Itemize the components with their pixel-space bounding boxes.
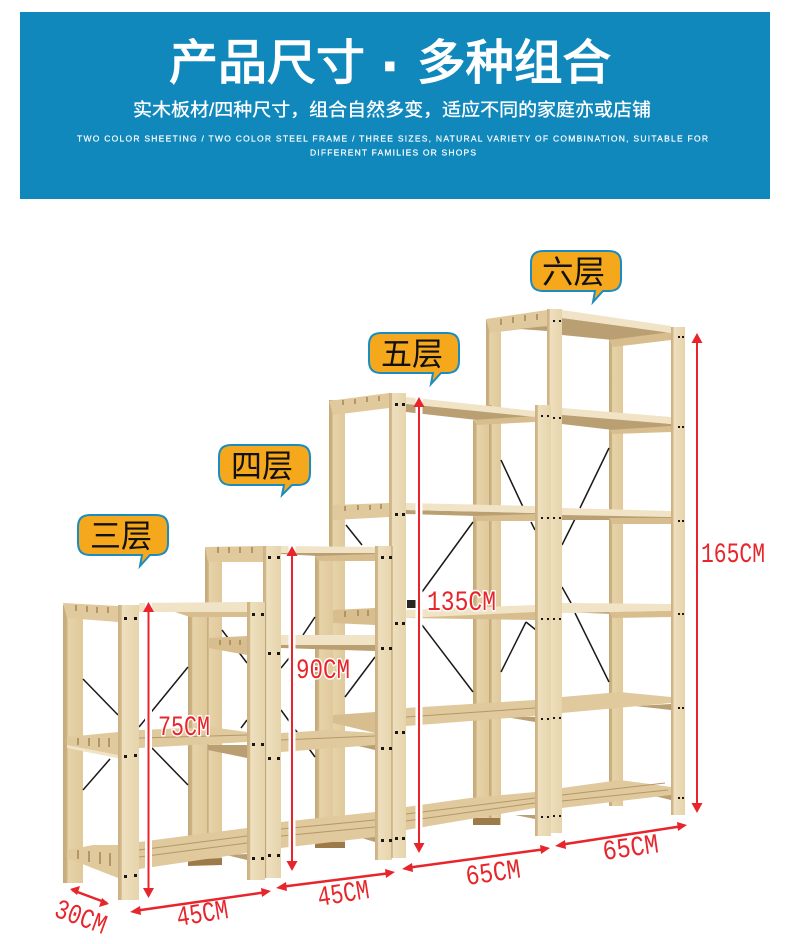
subtitle: 实木板材/四种尺寸，组合自然多变，适应不同的家庭亦或店铺 bbox=[133, 100, 651, 120]
callout: 五层 bbox=[369, 333, 459, 384]
callout: 六层: 六层 bbox=[542, 254, 605, 290]
title: 多种组合 bbox=[417, 37, 611, 90]
small black fitting bbox=[407, 600, 417, 608]
header banner bbox=[20, 12, 770, 199]
arrow: 90CM height bbox=[286, 544, 298, 871]
english description: TWO COLOR SHEETING / TWO COLOR STEEL FRAME / THREE SIZES, NATURAL VARIETY OF COMBINATION, SUITABLE FOR bbox=[77, 134, 708, 144]
label: 75CM: 75CM bbox=[158, 713, 210, 744]
label: 90CM: 90CM bbox=[296, 656, 350, 687]
six-tier shelf bbox=[486, 309, 685, 833]
callout: 四层 bbox=[219, 445, 310, 495]
label: 45CM second: 45CM bbox=[316, 876, 372, 915]
english description bbox=[77, 134, 708, 158]
arrow: 165CM height bbox=[692, 333, 702, 813]
arrow: 65CM width, first bbox=[402, 845, 550, 872]
three-tier shelf bbox=[63, 602, 265, 900]
label: 45CM first: 45CM bbox=[175, 896, 231, 935]
five-tier shelf bbox=[329, 393, 551, 858]
label: 65CM second: 65CM bbox=[601, 830, 661, 869]
arrow: 30CM depth bbox=[70, 886, 109, 907]
title bbox=[169, 34, 611, 97]
arrow: 45CM width, second bbox=[276, 869, 395, 891]
arrow: 135CM height bbox=[414, 395, 424, 853]
callout: 五层: 五层 bbox=[381, 336, 443, 372]
callout: 三层: 三层 bbox=[90, 518, 152, 554]
callout: 四层: 四层 bbox=[231, 448, 293, 484]
callout: 六层 bbox=[531, 251, 621, 302]
callout: 三层 bbox=[78, 515, 168, 566]
arrow: 65CM width, second bbox=[555, 822, 687, 849]
title: · bbox=[382, 34, 401, 97]
label: 135CM: 135CM bbox=[427, 588, 496, 619]
title: 产品尺寸 bbox=[169, 37, 365, 90]
arrow: 75CM height bbox=[143, 600, 154, 898]
label: 165CM: 165CM bbox=[701, 540, 765, 571]
arrow: 45CM width, first bbox=[130, 888, 271, 915]
four-tier shelf bbox=[205, 546, 392, 878]
english description: DIFFERENT FAMILIES OR SHOPS bbox=[310, 148, 476, 158]
label: 65CM first: 65CM bbox=[464, 856, 523, 894]
